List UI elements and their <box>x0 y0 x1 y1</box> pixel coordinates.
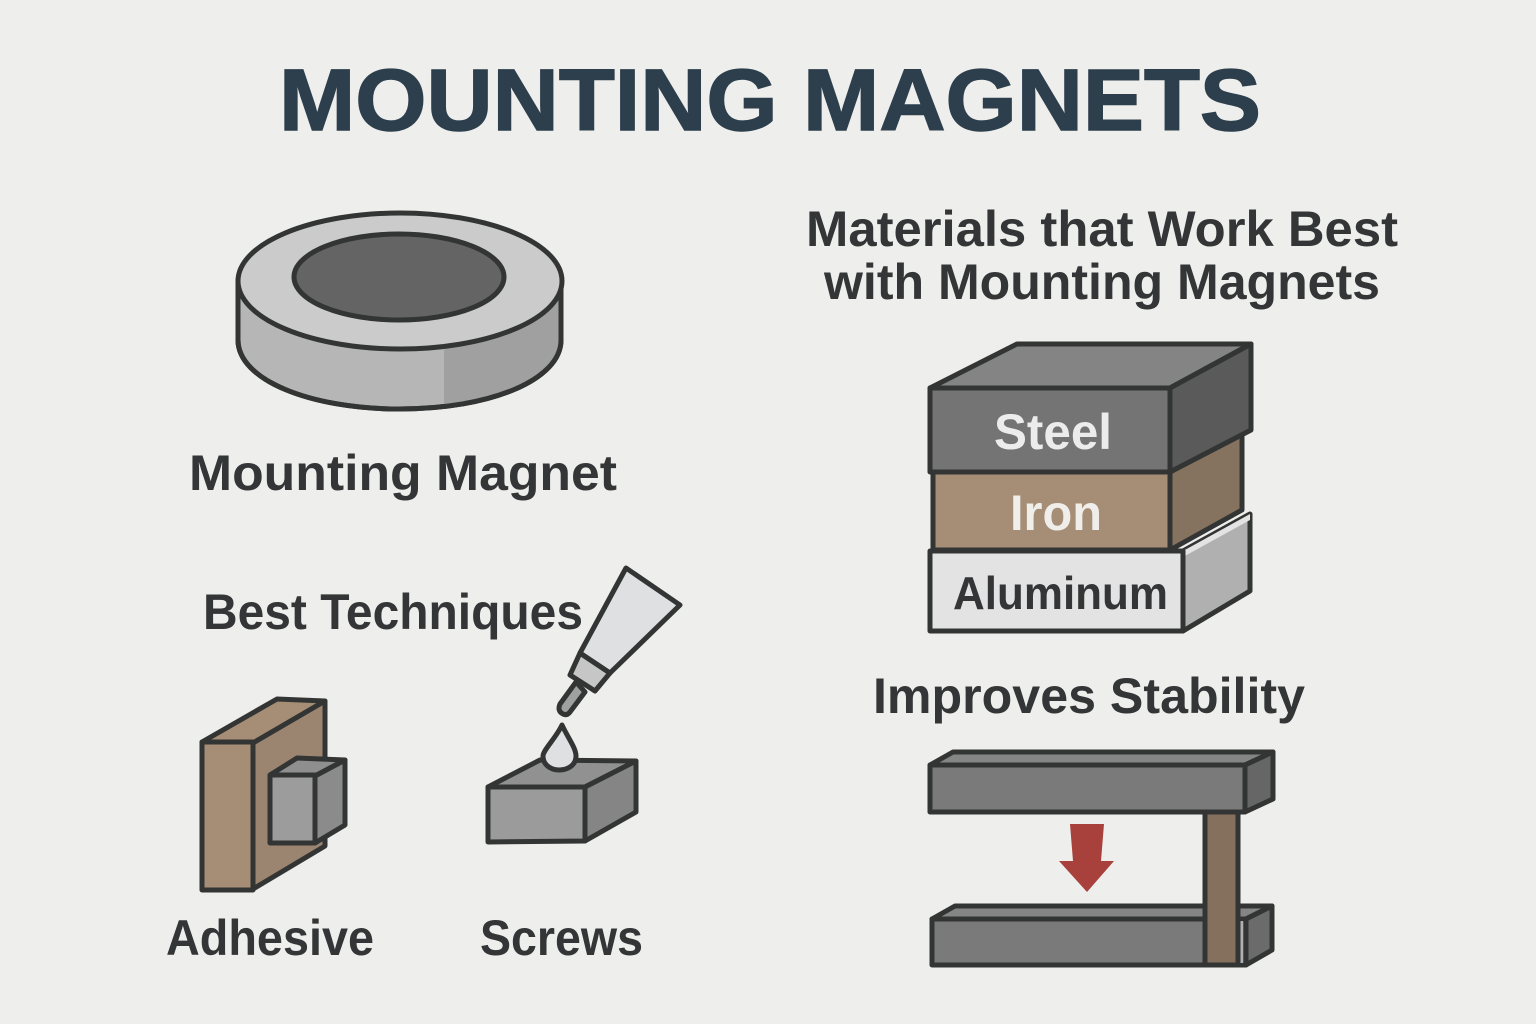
label: mounting magnet: Mounting Magnet <box>189 445 617 501</box>
layer: aluminum: Aluminum <box>953 567 1168 619</box>
arrow: downward force <box>1059 824 1114 892</box>
layer: iron <box>933 432 1242 550</box>
title: MOUNTING MAGNETS <box>279 52 1261 149</box>
heading: improves stability: Improves Stability <box>873 668 1305 724</box>
heading: best techniques: Best Techniques <box>203 584 583 640</box>
tube body <box>580 568 680 673</box>
icon: stability diagram <box>930 752 1273 965</box>
icon: adhesive tube <box>559 568 680 715</box>
layer: aluminum <box>930 514 1250 631</box>
icon: mounting magnet <box>238 213 562 409</box>
heading: materials <box>806 201 1398 310</box>
heading: materials: with Mounting Magnets <box>823 254 1380 310</box>
support post <box>1205 812 1238 965</box>
tube collar <box>570 653 610 691</box>
heading: materials: Materials that Work Best <box>806 201 1398 257</box>
icon: adhesive block <box>202 699 345 890</box>
label: adhesive: Adhesive <box>166 910 374 966</box>
label: screws: Screws <box>480 910 643 966</box>
layer: steel <box>930 344 1251 472</box>
icon: glue drop <box>543 725 576 770</box>
top plate <box>930 752 1273 812</box>
layer: iron: Iron <box>1010 485 1102 541</box>
bottom plate <box>932 906 1272 965</box>
tube nozzle <box>559 682 585 715</box>
material stack <box>930 344 1251 631</box>
icon: screw block <box>488 760 636 842</box>
layer: steel: Steel <box>994 404 1112 460</box>
